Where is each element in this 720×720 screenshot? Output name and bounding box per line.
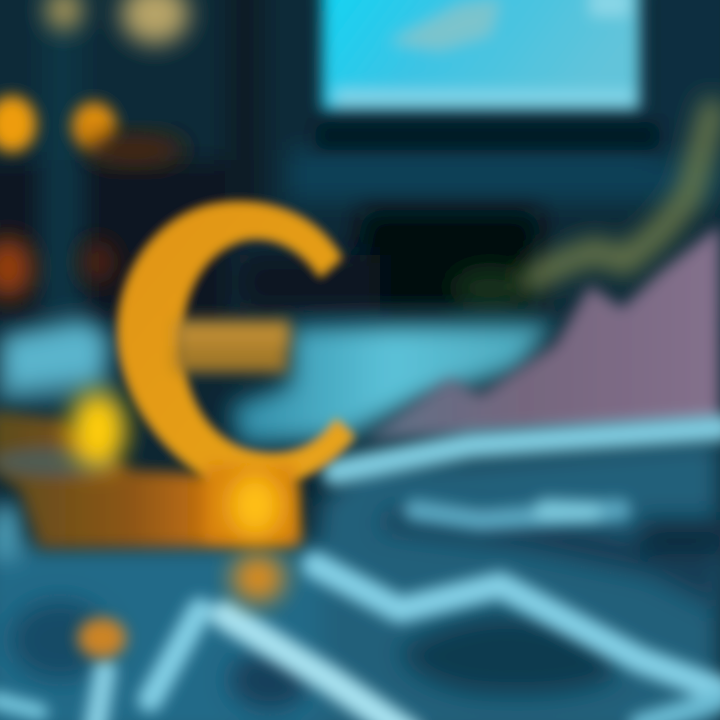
chart: mauve mountain area [365, 225, 720, 440]
icon: left orange lamps [0, 96, 185, 298]
panel: dark central shadow [240, 210, 540, 310]
panel: monitor screen [322, 0, 640, 110]
panel: light-blue desk surface [0, 318, 555, 445]
panel: dark floor pockets [10, 510, 720, 710]
panel: monitor lower frame [315, 122, 660, 150]
panel: light blue road lines [0, 428, 720, 720]
panel: dark upper wall [0, 0, 720, 320]
chart: olive trend highlight [525, 100, 715, 285]
panel: lower floor circuit base [0, 440, 720, 720]
icon: lower orange reflection [78, 618, 126, 658]
icon: euro stem glow [205, 465, 295, 602]
icon: euro symbol [118, 202, 355, 487]
icon: yellow coin glow [70, 392, 126, 468]
panel: bronze base plinth [0, 410, 300, 548]
icon: euro curved body [118, 202, 355, 487]
icon: top-left ceiling lights [46, 0, 189, 44]
icon: euro crossbars [175, 320, 290, 372]
